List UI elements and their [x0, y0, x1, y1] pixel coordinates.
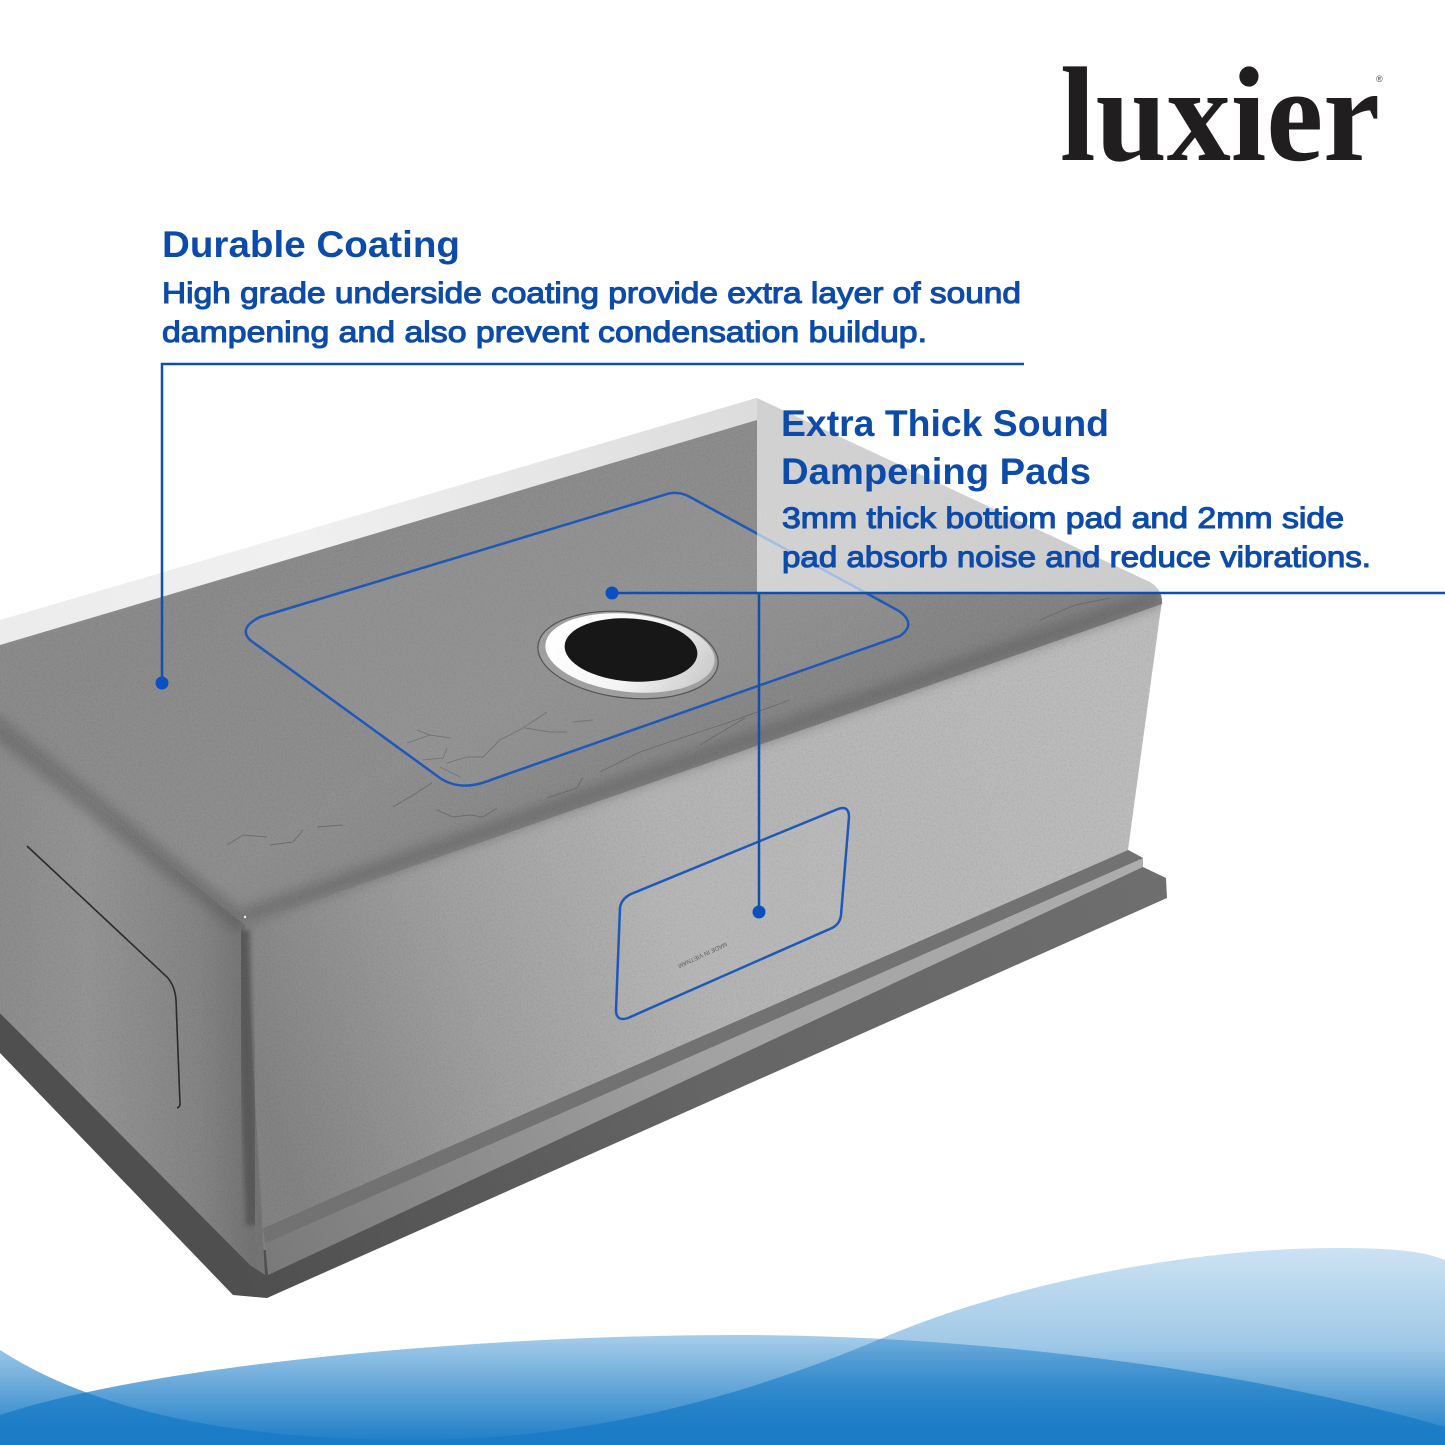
- fold shading between faces: [0, 398, 1170, 1278]
- text: Extra Thick description: 3mm thick bottiom pad and 2mm side: [782, 502, 1344, 535]
- heading: Extra Thick Sound Dampening Pads: [781, 403, 1109, 492]
- text: Extra Thick description: [782, 502, 1371, 574]
- flange lower band: [0, 850, 1167, 1298]
- logo: luxier: ®: [1376, 74, 1383, 84]
- logo: luxier: luxier: [1060, 41, 1380, 190]
- leader: Durable Coating: [156, 364, 1024, 690]
- heading: Durable Coating: Durable Coating: [162, 224, 460, 265]
- sink photo (underside): [0, 398, 1170, 1298]
- heading: Extra Thick Sound Dampening Pads: Dampening Pads: [781, 451, 1091, 492]
- corner base: [235, 920, 270, 1250]
- flange step face: [265, 858, 1143, 1275]
- left side pad edge: [27, 846, 180, 1108]
- coating cracks: [227, 598, 1110, 845]
- bottom waves: [0, 1248, 1445, 1445]
- translucent panel behind Extra Thick heading: [757, 396, 1445, 592]
- corner highlight: [244, 916, 246, 918]
- text: Durable Coating description: [162, 277, 1021, 349]
- surface grain: [0, 398, 1170, 1278]
- front side face: [245, 600, 1162, 1228]
- text: Durable Coating description: High grade underside coating provide extra layer of sound: [162, 277, 1021, 310]
- left end face: [0, 725, 265, 1275]
- flange shadow strip: [263, 850, 1143, 1243]
- stamp on side pad: MADE IN VIETNAM: [677, 940, 728, 968]
- drain ring: [534, 603, 722, 707]
- outline: bottom pad: [246, 493, 908, 786]
- heading: Extra Thick Sound Dampening Pads: Extra Thick Sound: [781, 403, 1109, 444]
- text: Durable Coating description: dampening and also prevent condensation buildup.: [162, 316, 927, 349]
- wave: front wave: [0, 1335, 1445, 1445]
- drain hole: [562, 614, 700, 686]
- underside top face: [0, 398, 1162, 925]
- outline: side pad: [616, 808, 849, 1019]
- rim strip: [0, 398, 757, 645]
- wave: rear light wave: [0, 1248, 1445, 1445]
- leader: Extra Thick pads: [606, 586, 1445, 918]
- text: Extra Thick description: pad absorb noise and reduce vibrations.: [782, 541, 1371, 574]
